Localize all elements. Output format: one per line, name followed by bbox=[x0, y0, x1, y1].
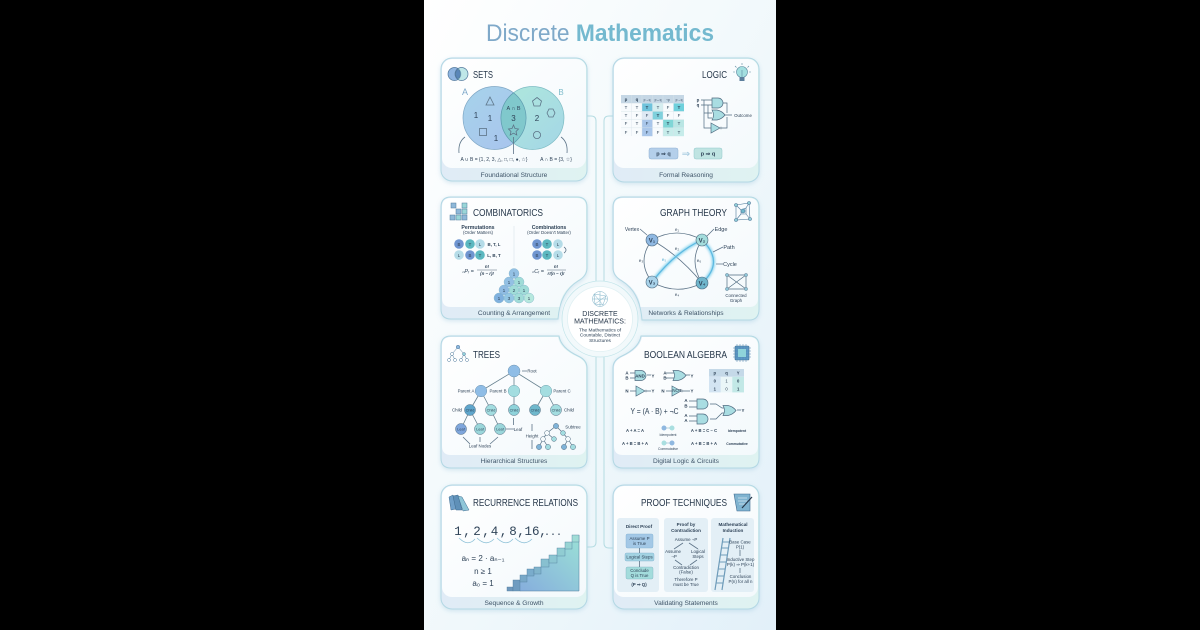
column: direct proof: Assume P bbox=[629, 536, 650, 541]
implication boxes: p ⇒ q bbox=[701, 152, 715, 158]
column: mathematical induction: P(1) bbox=[736, 544, 745, 550]
implication boxes: ⇒ bbox=[682, 149, 690, 160]
truth table: p bbox=[625, 97, 628, 102]
column: proof by contradiction bbox=[664, 518, 708, 592]
footer: networks and relationships: Networks & Relationships bbox=[648, 310, 724, 317]
gates row: B bbox=[625, 376, 629, 380]
column: direct proof: Conclude bbox=[630, 568, 649, 573]
truth table: F bbox=[667, 113, 670, 118]
icon: tree bbox=[448, 345, 468, 362]
gates row: N bbox=[625, 388, 629, 394]
sequence: 1 bbox=[454, 525, 462, 539]
truth table: p→q bbox=[644, 98, 651, 102]
column: proof by contradiction: Assume bbox=[665, 549, 681, 554]
icon: graph bbox=[734, 202, 752, 222]
column: mathematical induction bbox=[711, 518, 755, 592]
truth table: 1 bbox=[725, 378, 728, 384]
tree diagram: Leaf bbox=[514, 427, 523, 432]
truth table: p bbox=[714, 370, 717, 376]
column: mathematical induction: P(k) ⇒ P(k+1) bbox=[727, 562, 755, 567]
icon: ladder bbox=[715, 538, 730, 590]
recurrence formula bbox=[462, 554, 505, 588]
combinations bbox=[527, 225, 571, 276]
panel: recurrence relations bbox=[441, 485, 587, 609]
heading: boolean algebra: BOOLEAN ALGEBRA bbox=[644, 350, 727, 361]
boolean identities: Commutative bbox=[726, 442, 748, 446]
icon: chip bbox=[733, 344, 751, 362]
column: proof by contradiction: Therefore P bbox=[674, 577, 698, 582]
recurrence formula: a₀ = 1 bbox=[472, 579, 494, 588]
title: Discrete Mathematics bbox=[486, 20, 714, 47]
venn diagram: 1 bbox=[474, 111, 479, 120]
logic gates: p bbox=[697, 98, 700, 102]
column: direct proof: Logical Steps bbox=[626, 554, 653, 560]
truth table: F bbox=[678, 113, 681, 118]
sequence: 4 bbox=[491, 525, 498, 539]
boolean identities: A + B = B + A bbox=[622, 441, 648, 446]
footer: counting and arrangement: Counting & Arrangement bbox=[478, 310, 550, 317]
gates row bbox=[625, 370, 694, 396]
permutations: L bbox=[458, 253, 461, 258]
combined circuit: B bbox=[684, 404, 688, 408]
footer: formal reasoning: Formal Reasoning bbox=[659, 172, 713, 179]
gates row: N bbox=[661, 388, 665, 394]
truth table: p↔q bbox=[655, 98, 662, 102]
icon: blocks bbox=[450, 203, 467, 220]
truth table: F bbox=[646, 121, 649, 126]
graph diagram: Path bbox=[723, 245, 735, 251]
combinations: n! bbox=[554, 264, 559, 269]
column: mathematical induction: Mathematical bbox=[718, 522, 748, 527]
panel: logic bbox=[613, 58, 759, 182]
truth table: T bbox=[678, 130, 681, 135]
permutations bbox=[454, 225, 501, 276]
combinations: B bbox=[536, 253, 539, 258]
graph diagram: V₃ bbox=[649, 280, 656, 286]
pascal triangle: 1 bbox=[503, 288, 506, 294]
column: proof by contradiction: ¬P bbox=[671, 554, 677, 559]
graph diagram: e₂ bbox=[675, 246, 679, 251]
graph diagram: e₆ bbox=[697, 258, 701, 263]
permutations: T bbox=[479, 253, 482, 258]
icon: network sphere bbox=[592, 292, 608, 306]
venn diagram: 2 bbox=[535, 114, 540, 123]
tree diagram: Child bbox=[552, 408, 560, 412]
graph diagram: e₃ bbox=[639, 258, 643, 263]
combinations: Combinations bbox=[532, 225, 566, 231]
central hub: Countable, Distinct bbox=[580, 332, 621, 338]
combined circuit: A bbox=[684, 398, 688, 403]
truth table: T bbox=[625, 105, 628, 110]
venn diagram: A bbox=[462, 87, 468, 97]
column: proof by contradiction: Steps bbox=[692, 554, 704, 559]
boolean identities: A + B = B + A bbox=[691, 441, 717, 446]
footer: hierarchical structures: Hierarchical Structures bbox=[481, 458, 548, 465]
subtree diagram bbox=[526, 423, 581, 450]
footer: validating statements: Validating Statements bbox=[654, 600, 719, 607]
permutations: (Order Matters) bbox=[463, 230, 494, 235]
panel: graph theory bbox=[613, 197, 759, 320]
implication boxes bbox=[649, 148, 722, 160]
icon: venn bbox=[448, 68, 468, 80]
truth table: p→q bbox=[676, 98, 683, 102]
formula: Y = (A · B) + ¬C bbox=[630, 407, 679, 416]
icon: dominoes bbox=[449, 495, 469, 511]
central hub: Structures bbox=[589, 338, 612, 344]
sequence: , bbox=[517, 525, 525, 539]
tree diagram: Child bbox=[466, 408, 474, 412]
graph diagram: Vertex bbox=[625, 227, 640, 233]
graph diagram: e₅ bbox=[662, 257, 666, 262]
implication boxes: p ⇒ q bbox=[656, 152, 671, 158]
boolean identities: Idempotent bbox=[660, 433, 677, 437]
column: mathematical induction: Conclusion bbox=[730, 574, 752, 579]
gates row: Y bbox=[691, 388, 694, 394]
column: direct proof: (P ⇒ Q) bbox=[631, 582, 647, 587]
venn diagram: 3 bbox=[511, 114, 516, 123]
permutations: L bbox=[479, 242, 482, 247]
venn diagram: 1 bbox=[488, 114, 493, 123]
graph diagram: V₁ bbox=[649, 238, 656, 244]
truth table: Y bbox=[737, 370, 740, 376]
pascal triangle: 1 bbox=[513, 272, 516, 278]
truth table: F bbox=[636, 130, 639, 135]
divider bbox=[513, 226, 515, 266]
truth table: T bbox=[657, 105, 660, 110]
boolean identities: A + B = C − C bbox=[691, 428, 717, 433]
pascal triangle: 2 bbox=[513, 288, 516, 294]
permutations: L, B, T bbox=[487, 253, 501, 258]
heading: combinatorics: COMBINATORICS bbox=[473, 208, 543, 219]
tree diagram: Leaf bbox=[457, 428, 466, 432]
combined circuit: A bbox=[684, 413, 688, 418]
sequence: 2 bbox=[473, 525, 481, 539]
gates row: Y bbox=[691, 374, 694, 378]
column: direct proof: Q is True bbox=[631, 573, 649, 578]
combined circuit bbox=[684, 398, 745, 424]
icon: light bulb bbox=[733, 63, 751, 81]
central hub: MATHEMATICS: bbox=[574, 318, 626, 326]
truth table: F bbox=[625, 130, 628, 135]
truth table: 1 bbox=[737, 386, 740, 391]
truth table: T bbox=[657, 113, 660, 118]
tree diagram: Parent C bbox=[553, 388, 571, 394]
tree diagram: Child bbox=[510, 408, 518, 412]
tree diagram: Parent B bbox=[489, 388, 507, 394]
venn diagram: B bbox=[558, 88, 564, 97]
truth table: 0 bbox=[737, 378, 740, 384]
sequence: , bbox=[539, 525, 547, 539]
column: proof by contradiction: must be True bbox=[673, 582, 699, 587]
permutations: ₙPᵣ = bbox=[462, 269, 475, 275]
sequence: 16 bbox=[524, 525, 540, 539]
tree diagram: Root bbox=[527, 368, 537, 374]
truth table: F bbox=[625, 121, 628, 126]
recurrence formula: aₙ = 2 · aₙ₋₁ bbox=[462, 554, 505, 563]
heading: sets: SETS bbox=[473, 70, 493, 81]
pascal triangle: 1 bbox=[508, 280, 511, 286]
central hub: DISCRETE bbox=[582, 311, 618, 318]
permutations: T bbox=[469, 242, 472, 247]
column: proof by contradiction: Assume ¬P bbox=[675, 537, 697, 542]
permutations: B, T, L bbox=[488, 242, 501, 247]
truth table: F bbox=[646, 113, 649, 118]
permutations: B bbox=[458, 242, 461, 247]
truth table: T bbox=[667, 121, 670, 126]
combinations: ₙCᵣ = bbox=[532, 269, 545, 275]
sequence: , bbox=[463, 525, 471, 539]
combinations: T bbox=[546, 242, 549, 247]
staircase chart bbox=[507, 535, 579, 591]
footer: digital logic and circuits: Digital Logic & Circuits bbox=[653, 458, 720, 465]
column: proof by contradiction: (False) bbox=[679, 570, 693, 574]
pascal triangle: 1 bbox=[498, 296, 501, 302]
column: proof by contradiction: Contradiction bbox=[673, 565, 699, 570]
footer: sequence and growth: Sequence & Growth bbox=[484, 600, 544, 607]
truth table: F bbox=[646, 130, 649, 135]
subtree diagram: Subtree bbox=[565, 424, 581, 430]
column: direct proof: is True bbox=[633, 541, 647, 546]
heading: trees: TREES bbox=[473, 350, 500, 361]
panel: boolean algebra bbox=[613, 336, 759, 468]
pascal triangle: 3 bbox=[508, 296, 511, 302]
sequence: 8 bbox=[509, 525, 517, 539]
column: proof by contradiction: Logical bbox=[691, 549, 705, 554]
column: mathematical induction: Induction bbox=[723, 528, 744, 533]
truth table: T bbox=[636, 105, 639, 110]
column: mathematical induction: Base Case bbox=[729, 540, 751, 544]
combinations: T bbox=[546, 253, 549, 258]
central hub bbox=[562, 281, 638, 357]
subtree diagram: Height bbox=[526, 434, 539, 438]
truth table: 1 bbox=[714, 386, 717, 391]
column: proof by contradiction: Contradiction bbox=[671, 528, 701, 533]
column: proof by contradiction: Proof by bbox=[677, 522, 696, 527]
infographic page background bbox=[424, 0, 776, 630]
permutations: Permutations bbox=[461, 225, 495, 231]
truth table: 0 bbox=[725, 386, 728, 391]
venn diagram bbox=[459, 86, 572, 163]
tree diagram: Child bbox=[487, 408, 495, 412]
tree diagram: Leaf bbox=[496, 428, 505, 432]
truth table: T bbox=[678, 105, 681, 110]
sequence: , bbox=[500, 525, 507, 539]
graph diagram: Cycle bbox=[723, 262, 737, 268]
combined circuit: Y bbox=[742, 408, 745, 413]
truth table: q bbox=[636, 97, 639, 102]
combinations: B bbox=[536, 242, 539, 247]
truth table: T bbox=[636, 121, 639, 126]
truth table: F bbox=[657, 130, 660, 135]
gates row: B bbox=[663, 376, 667, 380]
panel: combinatorics bbox=[441, 197, 587, 319]
truth table: T bbox=[625, 113, 628, 118]
boolean identities bbox=[622, 426, 748, 451]
venn diagram: A ∪ B = {1, 2, 3, △, □, □, ●, ☆} bbox=[460, 157, 528, 163]
pascal triangle: 3 bbox=[518, 296, 521, 302]
graph diagram: V₄ bbox=[699, 282, 706, 288]
recurrence formula: n ≥ 1 bbox=[474, 567, 492, 576]
panel: proof techniques bbox=[613, 485, 759, 609]
gates row: Y bbox=[652, 388, 655, 394]
permutations: (n − r)! bbox=[480, 271, 494, 276]
central hub: The Mathematics of bbox=[579, 328, 622, 334]
gates row: A bbox=[625, 370, 629, 376]
tree diagram: Child bbox=[452, 408, 463, 412]
graph diagram: V₂ bbox=[699, 238, 706, 244]
connected graph icon: Connected bbox=[725, 293, 747, 298]
graph diagram: Edge bbox=[715, 227, 727, 233]
logic gates: q bbox=[697, 102, 700, 108]
truth table: T bbox=[678, 121, 681, 126]
tree diagram bbox=[452, 365, 575, 448]
boolean identities: Commutative bbox=[658, 447, 678, 451]
truth table: 0 bbox=[714, 378, 717, 384]
connector lines to centre hub bbox=[587, 116, 613, 548]
truth table: T bbox=[657, 121, 660, 126]
sequence arcs bbox=[459, 538, 532, 543]
combinations: r!(n − r)! bbox=[548, 271, 565, 276]
permutations: B bbox=[469, 253, 472, 258]
column: direct proof bbox=[617, 518, 659, 592]
truth table: T bbox=[667, 130, 670, 135]
combined circuit: A bbox=[684, 418, 688, 423]
graph diagram: e₁ bbox=[675, 227, 679, 232]
venn diagram: A ∩ B = {3, ☆} bbox=[540, 157, 572, 163]
gates row: AND bbox=[635, 373, 645, 378]
gates row: Y bbox=[652, 374, 655, 378]
truth table: F bbox=[667, 105, 670, 110]
truth table: ¬p bbox=[666, 98, 670, 102]
heading: recurrence relations: RECURRENCE RELATIONS bbox=[473, 498, 578, 509]
logic gates bbox=[697, 98, 752, 133]
connected graph icon: Graph bbox=[730, 298, 743, 303]
gates row: A bbox=[663, 370, 667, 376]
sequence: ... bbox=[544, 528, 562, 539]
column: mathematical induction: P(n) for all n bbox=[729, 579, 753, 584]
footer: foundational structure: Foundational Structure bbox=[481, 172, 548, 179]
graph diagram: e₄ bbox=[675, 292, 679, 297]
graph diagram bbox=[625, 227, 737, 297]
heading: proof techniques: PROOF TECHNIQUES bbox=[641, 498, 727, 509]
pascal triangle: 1 bbox=[518, 280, 521, 286]
icon: scroll and quill bbox=[734, 494, 752, 511]
column: direct proof: Direct Proof bbox=[626, 524, 653, 529]
heading: graph theory: GRAPH THEORY bbox=[660, 208, 727, 219]
truth table: T bbox=[646, 105, 649, 110]
boolean identities: A + A = A bbox=[626, 428, 644, 433]
pascal triangle: 1 bbox=[528, 296, 531, 302]
tree diagram: Leaf Nodes bbox=[469, 444, 492, 448]
pascal triangle: 1 bbox=[523, 288, 526, 294]
combinations: L bbox=[557, 242, 560, 247]
venn diagram: 1 bbox=[494, 134, 499, 143]
truth table bbox=[621, 95, 684, 136]
panel: trees bbox=[441, 336, 587, 468]
venn diagram: A ∩ B bbox=[506, 106, 521, 112]
tree diagram: Child bbox=[564, 408, 575, 412]
column: mathematical induction: Inductive Step bbox=[727, 557, 755, 562]
heading: logic: LOGIC bbox=[702, 70, 727, 81]
sequence: , bbox=[482, 525, 490, 539]
pascal triangle bbox=[494, 268, 534, 303]
combinations: L bbox=[557, 253, 560, 258]
logic gates: Outcome bbox=[734, 113, 752, 118]
tree diagram: Leaf bbox=[476, 428, 485, 432]
truth table: F bbox=[636, 113, 639, 118]
combinations: (Order Doesn't Matter) bbox=[527, 230, 571, 235]
tree diagram: Parent A bbox=[458, 388, 474, 394]
truth table: q bbox=[725, 370, 728, 376]
boolean identities: Idempotent bbox=[728, 429, 747, 433]
connected graph icon bbox=[725, 273, 748, 303]
panel: sets bbox=[441, 58, 587, 181]
tree diagram: Child bbox=[531, 408, 539, 412]
permutations: n! bbox=[485, 264, 490, 269]
gates row: NOT bbox=[672, 388, 682, 393]
truth table bbox=[709, 369, 744, 392]
